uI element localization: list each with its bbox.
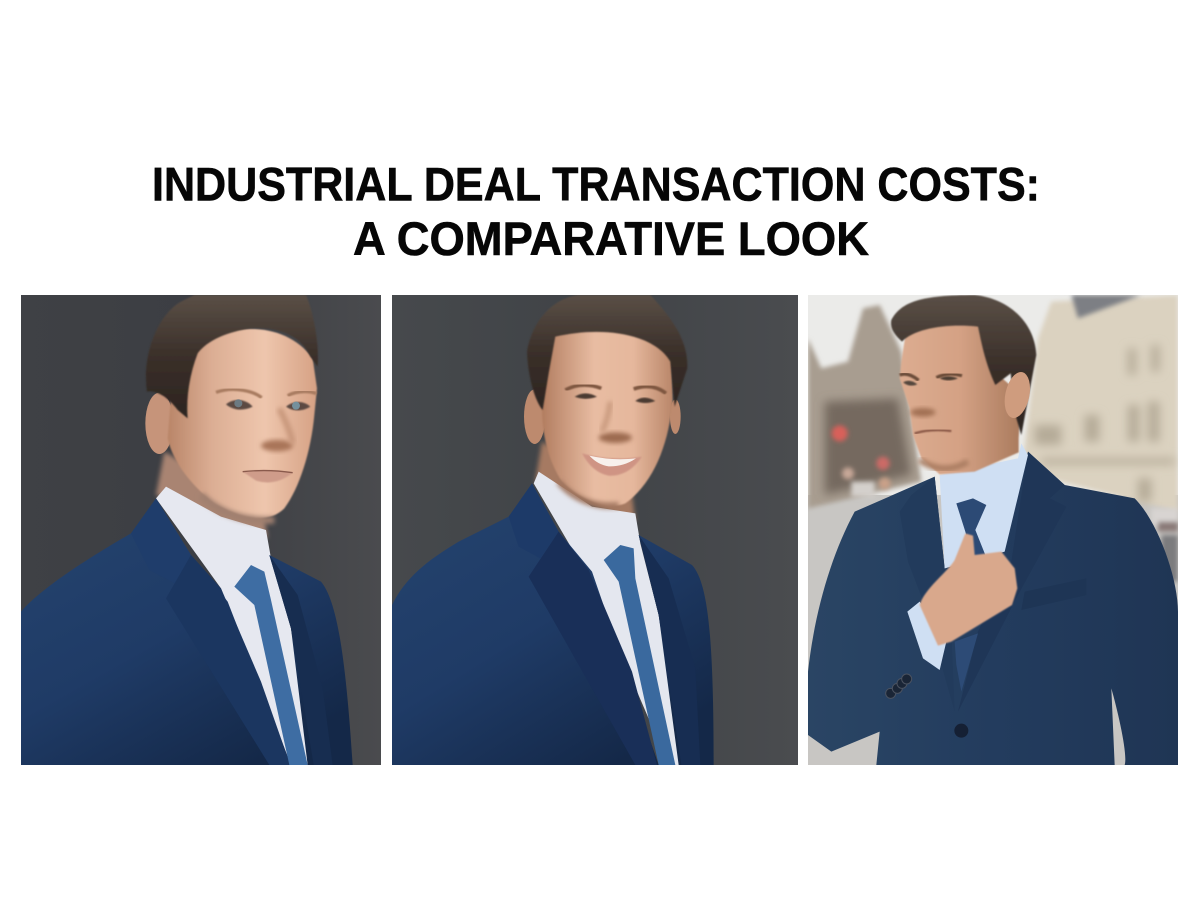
icon: hand on tie <box>920 533 1017 646</box>
icon: lower lapel <box>529 532 657 765</box>
icon: navy suit jacket <box>21 498 353 765</box>
title: A COMPARATIVE LOOK <box>353 212 869 265</box>
icon: lower lapel <box>166 555 290 765</box>
icon: hair <box>146 295 318 418</box>
icon: upper lapel <box>132 498 191 555</box>
panel: portrait centre, smiling <box>392 295 798 765</box>
icon: hair <box>527 295 687 410</box>
icon: shirt <box>534 472 683 765</box>
icon: shirt cuff <box>907 602 946 670</box>
icon: navy suit jacket <box>392 483 714 765</box>
icon: hair <box>891 295 1036 435</box>
icon: ears <box>524 389 681 444</box>
icon: breast pocket <box>1021 578 1086 610</box>
title <box>152 158 1040 265</box>
icon: lapel right <box>958 452 1066 712</box>
icon: blue knit tie <box>604 545 675 765</box>
panel: portrait right, street background <box>808 295 1178 765</box>
icon: blurred street scene <box>808 295 1178 765</box>
icon: lower tie <box>955 633 978 692</box>
icon: blue knit tie <box>234 565 308 765</box>
icon: upper lapel <box>509 484 558 531</box>
icon: shirt <box>156 487 314 765</box>
icon: ear <box>1004 372 1030 418</box>
icon: shirt <box>940 443 1028 568</box>
icon: neck <box>535 442 635 522</box>
icon: jacket button <box>954 724 968 738</box>
icon: right lapel <box>639 535 700 765</box>
title: INDUSTRIAL DEAL TRANSACTION COSTS: <box>152 158 1040 210</box>
icon: sleeve buttons <box>886 674 912 698</box>
icon: dark tie <box>956 498 986 558</box>
icon: navy suit jacket <box>808 452 1178 765</box>
icon: profile facial features <box>900 374 968 468</box>
icon: face <box>542 324 673 506</box>
icon: face and neck <box>900 312 1021 474</box>
icon: neck <box>156 452 268 538</box>
icon: ear <box>145 393 173 454</box>
icon: right lapel <box>269 555 308 646</box>
icon: lapel left <box>934 476 945 568</box>
icon: facial features <box>201 389 316 520</box>
icon: face <box>168 329 317 518</box>
panel: portrait left, studio background <box>21 295 381 765</box>
icon: smiling facial features <box>559 385 666 506</box>
